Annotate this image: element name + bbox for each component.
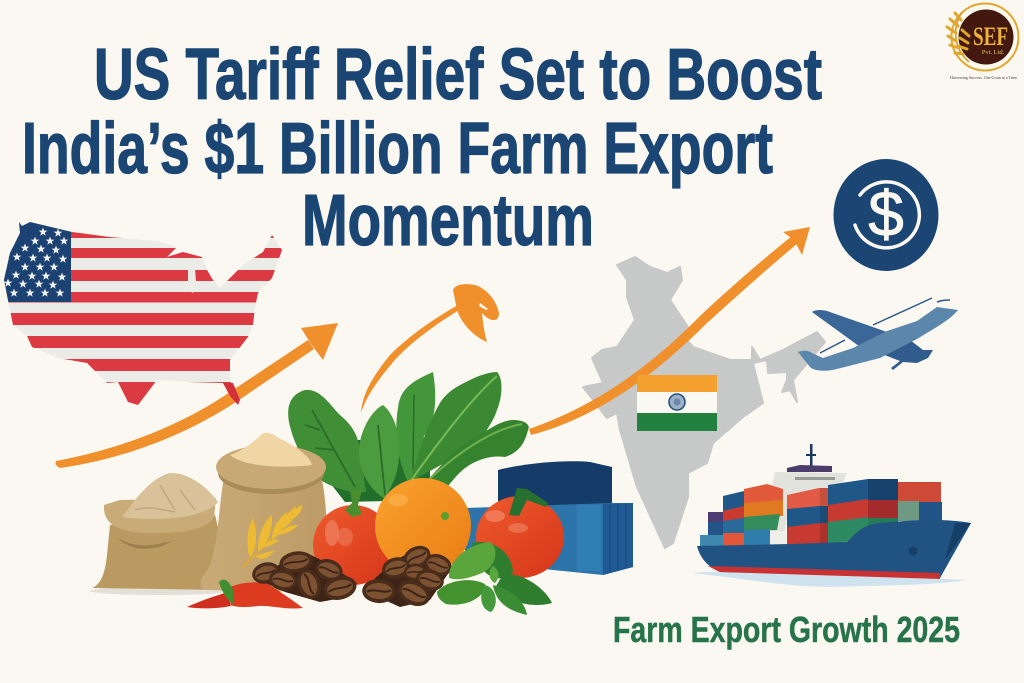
- title: Momentum: [302, 181, 594, 261]
- arrow: USA growth: [56, 323, 338, 468]
- Florida tip: [223, 383, 240, 405]
- title: [22, 35, 822, 261]
- sack: right grain bag with wheat: [201, 433, 326, 592]
- water: [692, 572, 967, 587]
- tomato: right: [476, 488, 564, 578]
- coffee beans: middle cluster: [362, 542, 455, 611]
- containers: stacked behind produce: [465, 461, 633, 575]
- coffee beans: left cluster: [250, 549, 359, 604]
- map: USA with flag pattern: [4, 222, 282, 405]
- fruit: orange: [375, 478, 471, 574]
- basil leaves: [437, 542, 552, 615]
- containers: [700, 479, 942, 549]
- icon: dollar coin: $: [868, 178, 904, 250]
- leaves: green produce: [288, 372, 529, 502]
- hull: [697, 520, 971, 578]
- flag: India: [637, 375, 717, 431]
- title: US Tariff Relief Set to Boost: [94, 35, 822, 115]
- logo: SEF Pvt. Ltd.: Pvt. Ltd.: [982, 49, 1005, 56]
- logo: SEF Pvt. Ltd.: SEF: [973, 22, 1008, 51]
- ship: cargo vessel: [692, 444, 971, 587]
- superstructure: [770, 444, 847, 545]
- logo: SEF Pvt. Ltd.: [947, 4, 1018, 81]
- icon: dollar coin: [834, 159, 938, 271]
- sack: left grain bag: [90, 473, 230, 595]
- map: India: [583, 257, 825, 548]
- wheat emblem: [243, 505, 302, 567]
- icon: airplane: [798, 298, 958, 371]
- title: India’s $1 Billion Farm Export: [22, 109, 773, 189]
- arrow: main growth through India: [529, 227, 810, 435]
- arrow: curved with blob head: [361, 284, 499, 413]
- tomato: left: [313, 490, 393, 585]
- chili pepper: [187, 580, 303, 608]
